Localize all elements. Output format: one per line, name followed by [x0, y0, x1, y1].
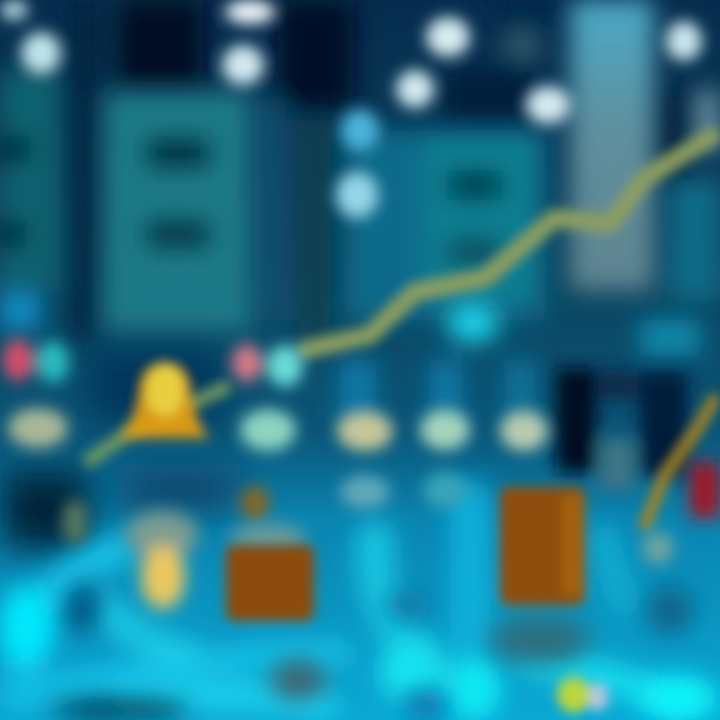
- bottom cyan swirls: [15, 500, 680, 705]
- building: centre-right: [345, 130, 545, 320]
- pale cap left: [230, 524, 306, 552]
- yellow green highlight: [557, 677, 608, 713]
- window lights: [0, 0, 702, 218]
- orange cylinder right: [500, 487, 585, 605]
- bell icon: [118, 362, 210, 438]
- red bar: [690, 462, 720, 518]
- building: left: [0, 70, 60, 290]
- light column: [570, 0, 654, 290]
- lower dark band: [0, 350, 240, 550]
- middle band glows: [0, 290, 700, 430]
- building: far right: [670, 180, 720, 300]
- dark columns: [556, 368, 688, 490]
- growth line: [90, 136, 714, 525]
- buildings: [0, 27, 720, 332]
- dim panel: [502, 27, 542, 63]
- glowing lamp: [126, 511, 198, 609]
- dark sky patches: [72, 0, 690, 340]
- indicator lights: [3, 339, 674, 564]
- orange cylinder left: [226, 545, 314, 621]
- building: centre-left: [104, 92, 250, 332]
- dark pockets: [50, 582, 694, 720]
- bright cyan accents: [0, 585, 718, 720]
